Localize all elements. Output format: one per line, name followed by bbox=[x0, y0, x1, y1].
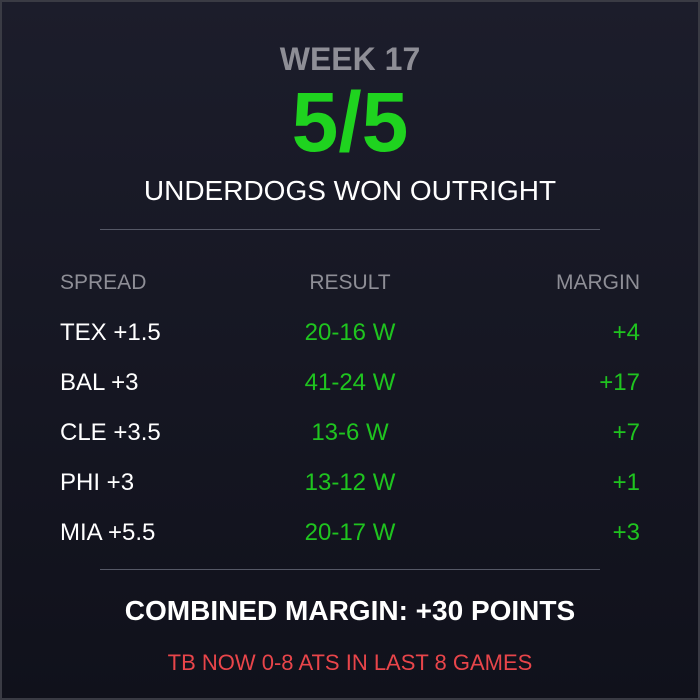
row: TEX: 20-16 W bbox=[305, 319, 395, 346]
row: BAL: +17 bbox=[599, 369, 640, 396]
row: MIA: 20-17 W bbox=[305, 519, 395, 546]
row: CLE: 13-6 W bbox=[311, 419, 389, 446]
row: PHI bbox=[60, 469, 640, 496]
row: MIA: +3 bbox=[613, 519, 640, 546]
heading: score: 5/5 bbox=[292, 75, 408, 169]
row: CLE: CLE +3.5 bbox=[60, 419, 161, 446]
row: MIA: MIA +5.5 bbox=[60, 519, 155, 546]
row: TEX: +4 bbox=[613, 319, 640, 346]
subtitle: UNDERDOGS WON OUTRIGHT bbox=[144, 175, 556, 206]
summary: combined margin: COMBINED MARGIN: +30 POINTS bbox=[125, 595, 575, 626]
row: PHI: +1 bbox=[613, 469, 640, 496]
row: BAL bbox=[60, 369, 640, 396]
table header: RESULT bbox=[309, 271, 391, 294]
row: BAL: BAL +3 bbox=[60, 369, 139, 396]
row: PHI: 13-12 W bbox=[305, 469, 395, 496]
row: TEX bbox=[60, 319, 640, 346]
row: CLE: +7 bbox=[613, 419, 640, 446]
table header bbox=[60, 271, 640, 294]
row: TEX: TEX +1.5 bbox=[60, 319, 161, 346]
table header: MARGIN bbox=[556, 271, 640, 294]
table header: SPREAD bbox=[60, 271, 146, 294]
row: PHI: PHI +3 bbox=[60, 469, 134, 496]
note: TB: TB NOW 0-8 ATS IN LAST 8 GAMES bbox=[168, 650, 532, 675]
row: CLE bbox=[60, 419, 640, 446]
row: BAL: 41-24 W bbox=[305, 369, 395, 396]
heading: week: WEEK 17 bbox=[280, 41, 420, 77]
row: MIA bbox=[60, 519, 640, 546]
